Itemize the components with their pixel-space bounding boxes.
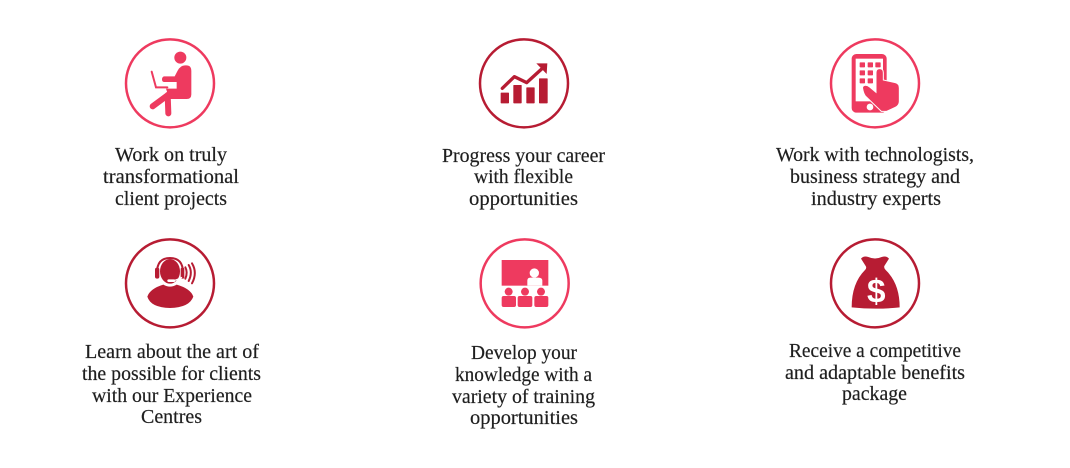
icon: money bag: $	[867, 274, 886, 311]
text: transformational client projects: client projects	[115, 188, 227, 210]
text: work with technologists: industry experts	[811, 188, 941, 210]
text: progress your career: Progress your career	[442, 145, 605, 167]
text: transformational client projects	[103, 144, 239, 210]
text: work with technologists: business strategy and	[790, 166, 960, 188]
text: work with technologists	[776, 144, 974, 210]
icon: person working on laptop	[126, 39, 214, 127]
text: competitive benefits: and adaptable benefits	[785, 362, 965, 384]
text: competitive benefits: Receive a competitive	[789, 340, 961, 362]
icon: rising bar chart	[480, 39, 568, 127]
icon: training classroom	[481, 239, 569, 327]
text: transformational client projects: Work on truly	[115, 144, 228, 166]
text: develop your knowledge: variety of training	[452, 386, 595, 408]
text: competitive benefits: package	[842, 383, 907, 405]
icon: hand tapping smartphone	[831, 39, 919, 127]
text: progress your career: with flexible	[474, 166, 573, 188]
text: develop your knowledge	[452, 342, 595, 429]
text: develop your knowledge: opportunities	[470, 407, 578, 429]
text: experience centres	[82, 341, 261, 428]
text: work with technologists: Work with technologists,	[776, 144, 974, 166]
text: competitive benefits	[785, 340, 965, 405]
text: develop your knowledge: knowledge with a	[455, 364, 592, 386]
text: develop your knowledge: Develop your	[471, 342, 577, 364]
text: progress your career	[442, 145, 605, 210]
icon: headset agent	[126, 239, 214, 327]
text: experience centres: Learn about the art of	[85, 341, 259, 363]
icon: money bag	[831, 239, 919, 327]
text: experience centres: Centres	[141, 406, 202, 428]
text: progress your career: opportunities	[469, 188, 578, 210]
text: transformational client projects: transformational	[103, 166, 239, 188]
text: experience centres: the possible for clients	[82, 363, 261, 385]
text: experience centres: with our Experience	[92, 385, 252, 407]
